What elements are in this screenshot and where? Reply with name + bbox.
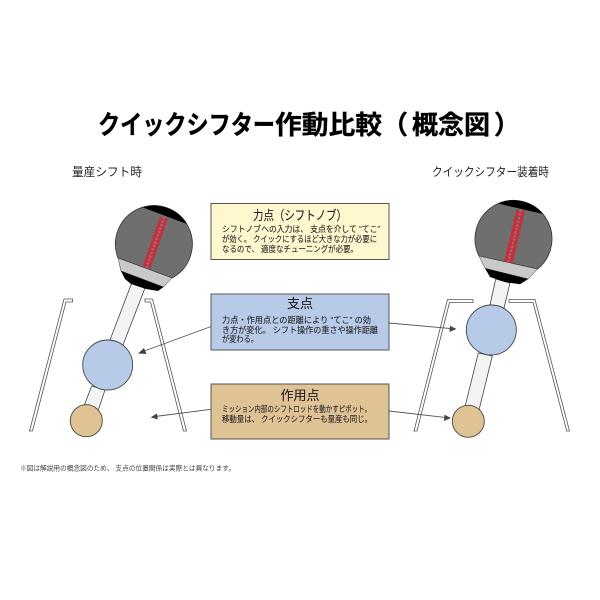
title	[98, 110, 520, 140]
lever lower	[84, 386, 105, 410]
body: が効く。 クイックにするほど大きな力が必要に	[222, 234, 377, 244]
heading: quick shifter: クイックシフター装着時	[432, 164, 549, 179]
heading: 力点（シフトノブ）	[253, 208, 347, 223]
lever upper	[490, 279, 510, 308]
arrow: fulcrum to right diagram	[389, 323, 456, 332]
panel: force point	[211, 204, 389, 260]
body: き方が変化。 シフト操作の重さや操作距離	[222, 325, 379, 335]
fulcrum	[83, 340, 133, 390]
shift knob	[475, 200, 552, 284]
panel: fulcrum	[211, 294, 389, 350]
body: 移動量は、 クイックシフターも量産も同じ。	[222, 414, 372, 424]
body	[222, 224, 380, 254]
lever lower	[465, 353, 492, 410]
shift knob	[115, 206, 192, 291]
right bracket	[509, 300, 570, 431]
diagram: quick shifter	[414, 200, 570, 437]
arrow: action point to right diagram	[389, 411, 451, 421]
body	[222, 315, 379, 344]
right bracket	[145, 299, 186, 431]
action point	[452, 405, 484, 437]
action point	[70, 405, 102, 437]
left bracket	[30, 299, 72, 431]
body: 力点・作用点との距離により “てこ” の効	[222, 315, 371, 325]
fulcrum	[466, 305, 516, 355]
title: クイックシフター	[98, 110, 275, 140]
diagram: standard shifter	[30, 206, 192, 437]
title: （	[382, 110, 408, 140]
heading: standard shift: 量産シフト時	[72, 165, 142, 179]
body: ミッション内部のシフトロッドを動かすピボット。	[222, 404, 371, 414]
footnote: ※図は解説用の概念図のため、 支点の位置関係は実際とは異なります。	[20, 464, 235, 472]
arrow: fulcrum to left diagram	[138, 326, 211, 354]
heading: 支点	[287, 296, 313, 311]
title: 作動比較	[275, 110, 382, 140]
left bracket	[414, 300, 473, 431]
title: ）	[494, 110, 520, 140]
body	[222, 404, 372, 424]
title: 概念図	[412, 110, 490, 140]
arrow: action point to left diagram	[151, 409, 211, 420]
heading: 作用点	[280, 388, 320, 403]
body: が変わる。	[222, 334, 258, 344]
body: なるので、 適度なチューニングが必要。	[222, 244, 358, 254]
lever upper	[110, 283, 145, 345]
panel: action point	[211, 384, 389, 439]
body: シフトノブへの入力は、 支点を介して “てこ”	[222, 224, 380, 234]
